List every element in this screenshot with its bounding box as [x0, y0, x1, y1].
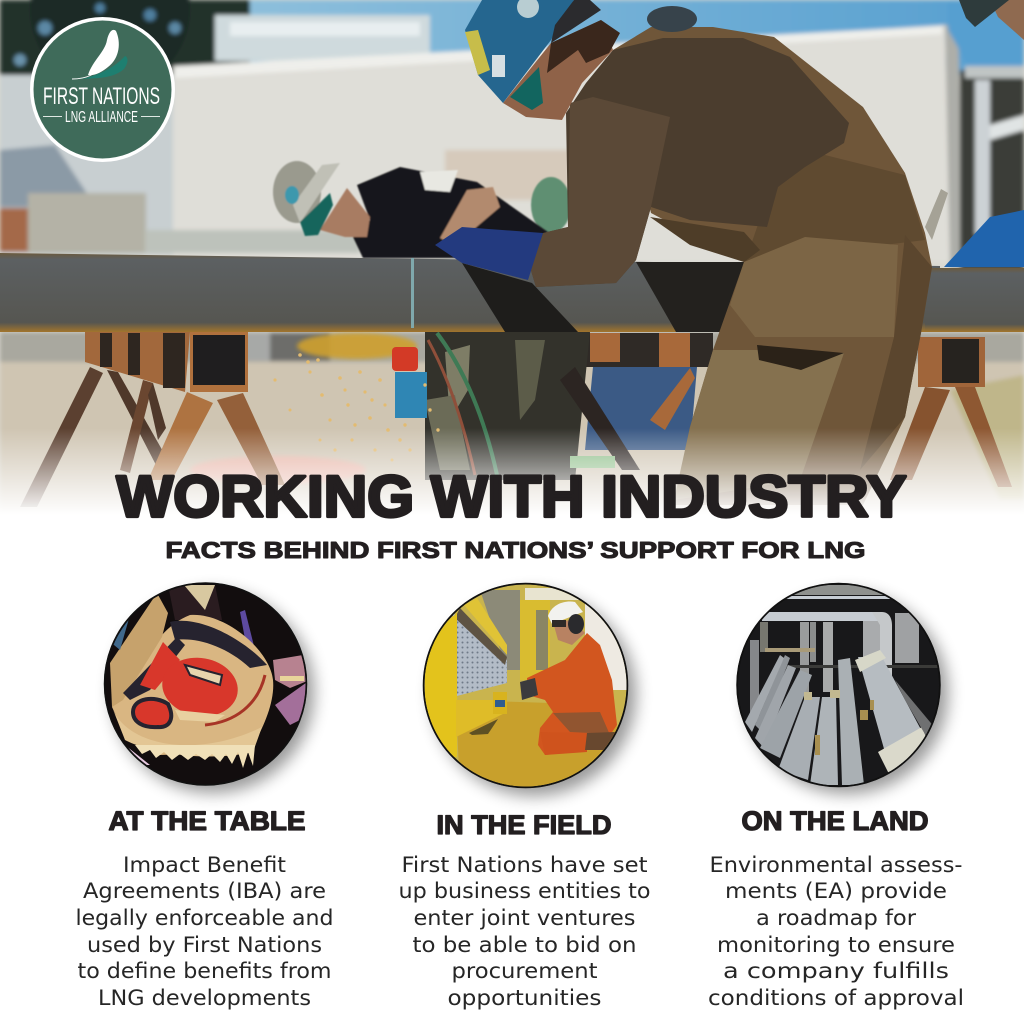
- body text: monitoring to ensure: [717, 933, 955, 958]
- sparks, torch and gas cylinder: [273, 258, 497, 475]
- title: WORKING WITH INDUSTRY: [116, 464, 906, 530]
- body text: Environmental assess-: [710, 853, 962, 878]
- panel: in the field: [398, 580, 650, 1011]
- hide held up: [110, 593, 168, 707]
- apron and trousers: [613, 27, 932, 505]
- panel: on the land: [708, 580, 964, 1011]
- body text: to be able to bid on: [412, 933, 636, 958]
- body text: a company fulfills: [723, 959, 949, 984]
- body text: [76, 853, 334, 1011]
- subtitle: FACTS BEHIND FIRST NATIONS’ SUPPORT FOR LNG: [166, 537, 866, 563]
- body text: legally enforceable and: [76, 906, 334, 931]
- heading: IN THE FIELD: [436, 810, 612, 840]
- goggles: [510, 67, 543, 110]
- welding glove: [435, 227, 543, 280]
- shadow across the beam: [462, 263, 578, 332]
- steel beam: [0, 253, 1024, 332]
- body text: First Nations have set: [402, 853, 648, 878]
- body text: Agreements (IBA) are: [83, 879, 326, 904]
- sawhorses: [20, 332, 1012, 507]
- hard hat: [465, 0, 574, 103]
- body text: opportunities: [448, 986, 602, 1011]
- face and hair: [503, 20, 613, 120]
- body text: LNG developments: [98, 986, 311, 1011]
- photo: ceremonial drum: [100, 580, 314, 793]
- formline design: [170, 621, 267, 668]
- green gas tank: [531, 177, 571, 233]
- other workers behind and under the beam: [425, 332, 697, 480]
- heading: AT THE TABLE: [108, 806, 306, 836]
- logo wordmark: FIRST NATIONS: [43, 83, 160, 110]
- body text: a roadmap for: [756, 906, 916, 931]
- body text: procurement: [452, 959, 598, 984]
- fade to white: [0, 428, 1024, 518]
- body text: conditions of approval: [708, 986, 964, 1011]
- body text: enter joint ventures: [414, 906, 636, 931]
- body text: to define benefits from: [78, 959, 332, 984]
- logo: First Nations LNG Alliance: [30, 17, 175, 162]
- body text: [398, 853, 650, 1011]
- body text: used by First Nations: [87, 933, 322, 958]
- heading: ON THE LAND: [742, 806, 928, 836]
- logo tagline: LNG ALLIANCE: [65, 109, 138, 126]
- photo: insulated pipelines: [735, 580, 948, 794]
- background: sky, trees and white building: [0, 0, 1024, 512]
- worker: [527, 633, 617, 755]
- body text: Impact Benefit: [123, 853, 286, 878]
- body text: up business entities to: [398, 879, 650, 904]
- pliers in pocket: [925, 189, 948, 240]
- drum fringe: [135, 745, 255, 768]
- body text: ments (EA) provide: [725, 879, 947, 904]
- rear welder: [273, 161, 548, 258]
- sweater arm: [530, 97, 670, 287]
- drum hide: [112, 615, 273, 755]
- photo: worker in orange coveralls: [420, 580, 636, 796]
- icon: feather: [72, 30, 128, 79]
- front welder: [435, 0, 948, 505]
- right-edge worker: [647, 0, 1024, 267]
- body text: [708, 853, 964, 1011]
- panel: at the table: [76, 580, 334, 1011]
- hero photo: welders working on a steel beam: [0, 0, 1024, 518]
- sweater body: [530, 38, 849, 287]
